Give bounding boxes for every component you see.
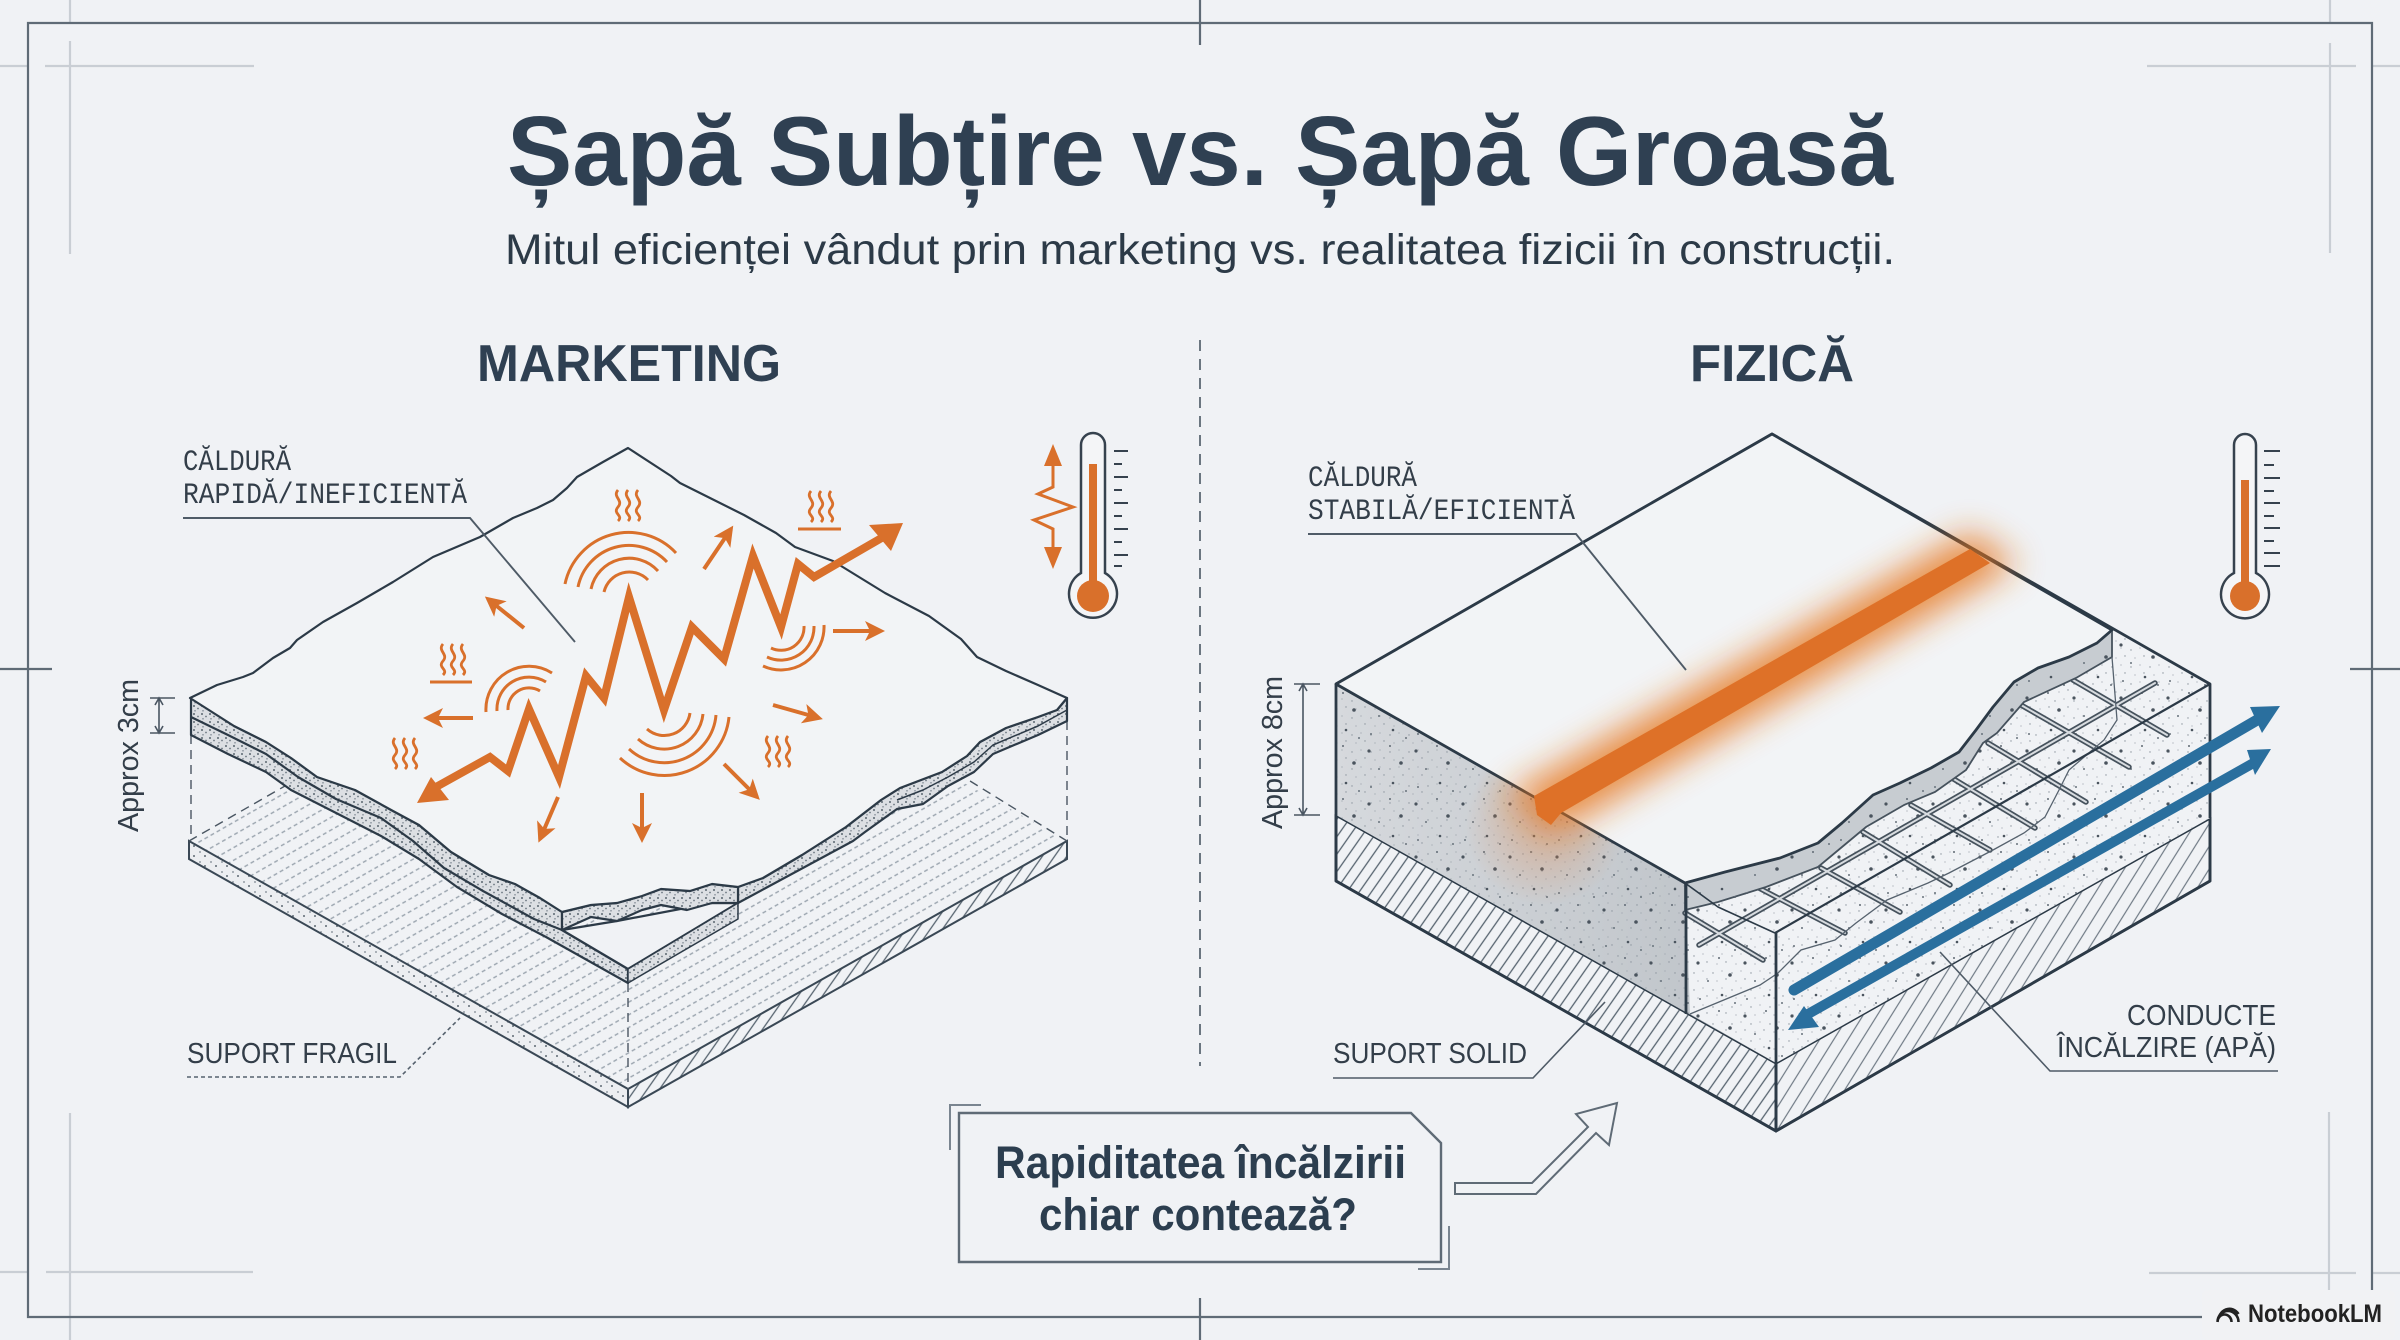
label: rapid heat: CĂLDURĂ <box>183 445 291 480</box>
notebooklm badge: NotebookLM <box>2248 1300 2382 1328</box>
dimension: 8cm: Approx 8cm <box>1257 676 1289 829</box>
heat spreading zigzag <box>417 523 903 803</box>
label: stable heat: CĂLDURĂ <box>1308 461 1417 496</box>
label: stable heat: STABILĂ/EFICIENTĂ <box>1308 494 1575 529</box>
callout question: Rapiditatea încălzirii <box>995 1137 1406 1188</box>
subtitle: Mitul eficienței vândut prin marketing vs. realitatea fizicii în construcții. <box>505 226 1895 274</box>
base layer fragile support <box>189 593 1067 1107</box>
center divider <box>1199 340 1201 1066</box>
blue pipes <box>1788 706 2280 1030</box>
solid support base <box>1336 815 2210 1131</box>
callout question <box>950 1105 1449 1269</box>
dimension: 3cm: Approx 3cm <box>113 679 145 832</box>
cutaway concrete <box>1686 631 2210 1063</box>
panel: physics diagram <box>1257 434 2280 1131</box>
thermometer stable <box>2221 434 2280 618</box>
label: fragile support: SUPORT FRAGIL <box>187 1038 397 1070</box>
block outline <box>1336 434 2210 1131</box>
warm heating strip <box>1534 549 1990 825</box>
heading: marketing: MARKETING <box>477 335 781 393</box>
steam icons <box>393 490 841 769</box>
label: heating pipes: CONDUCTE <box>2127 1000 2276 1032</box>
heading: fizica: FIZICĂ <box>1690 335 1854 393</box>
radiating arrows <box>427 529 881 839</box>
thin screed slab <box>190 448 1067 983</box>
label: rapid heat: RAPIDĂ/INEFICIENTĂ <box>183 478 467 513</box>
panel: marketing diagram <box>113 433 1128 1107</box>
label: solid support: SUPORT SOLID <box>1333 1038 1527 1070</box>
notebooklm badge <box>2202 1290 2395 1340</box>
thermometer fluctuating <box>1034 433 1128 618</box>
label: stable heat <box>1308 461 1686 670</box>
torn concrete lip <box>1685 630 2117 1014</box>
title: Șapă Subțire vs. Șapă Groasă <box>507 96 1894 208</box>
top surface <box>1336 434 2112 883</box>
concrete left face <box>1336 684 1776 1063</box>
arrow: to physics block <box>1455 1103 1617 1194</box>
heat waves <box>486 532 824 775</box>
label: solid support <box>1333 1002 1605 1078</box>
label: heating pipes <box>1940 952 2278 1071</box>
label: fragile support <box>187 1018 460 1077</box>
label: rapid heat <box>183 445 575 642</box>
callout question: chiar contează? <box>1039 1189 1357 1240</box>
rebar mesh <box>1685 680 2167 960</box>
label: heating pipes: ÎNCĂLZIRE (APĂ) <box>2056 1031 2276 1064</box>
dimension: 3cm <box>113 679 175 832</box>
dimension: 8cm <box>1257 676 1320 829</box>
